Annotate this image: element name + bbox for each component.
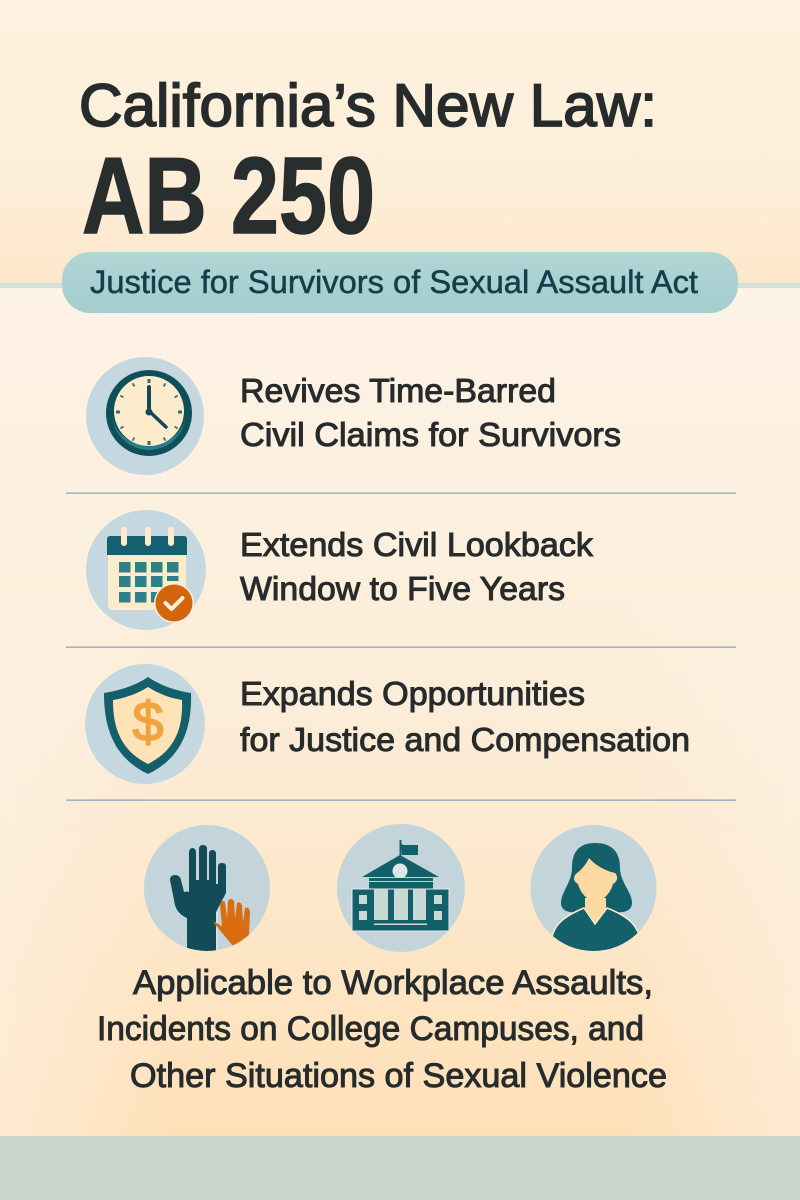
closing statement: Incidents on College Campuses, and — [97, 1010, 644, 1048]
footer band — [0, 1136, 800, 1200]
icon: calendar — [86, 510, 206, 630]
panel: compensation — [85, 664, 690, 784]
icon: clock — [86, 357, 204, 475]
divider — [66, 492, 736, 494]
panel: revives claims — [86, 357, 621, 475]
icon: raised hands — [144, 825, 270, 955]
text: revives claims: Revives Time-Barred — [240, 372, 556, 409]
divider — [66, 646, 736, 648]
subtitle pill — [62, 252, 738, 313]
icon: shield: $ — [132, 690, 164, 753]
icon: campus building — [337, 824, 465, 952]
divider — [66, 800, 736, 801]
icon: shield — [85, 664, 205, 784]
text: revives claims — [240, 372, 621, 453]
panel: lookback window — [86, 510, 594, 630]
closing statement: Applicable to Workplace Assaults, — [133, 964, 653, 1002]
subtitle pill: Justice for Survivors of Sexual Assault Act — [90, 264, 698, 300]
rule behind subtitle — [0, 283, 800, 288]
closing statement — [97, 964, 667, 1095]
text: lookback window: Window to Five Years — [240, 570, 565, 607]
title line: AB 250: AB 250 — [82, 135, 375, 257]
text: lookback window — [240, 526, 594, 607]
icon: woman — [530, 825, 656, 960]
text: revives claims: Civil Claims for Survivors — [240, 416, 621, 453]
text: compensation: for Justice and Compensation — [240, 721, 690, 758]
text: compensation — [240, 675, 690, 758]
title — [79, 72, 657, 257]
text: lookback window: Extends Civil Lookback — [240, 526, 594, 563]
closing statement: Other Situations of Sexual Violence — [130, 1057, 667, 1095]
title line: California's New Law: California’s New Law: — [79, 72, 657, 139]
text: compensation: Expands Opportunities — [240, 675, 585, 712]
